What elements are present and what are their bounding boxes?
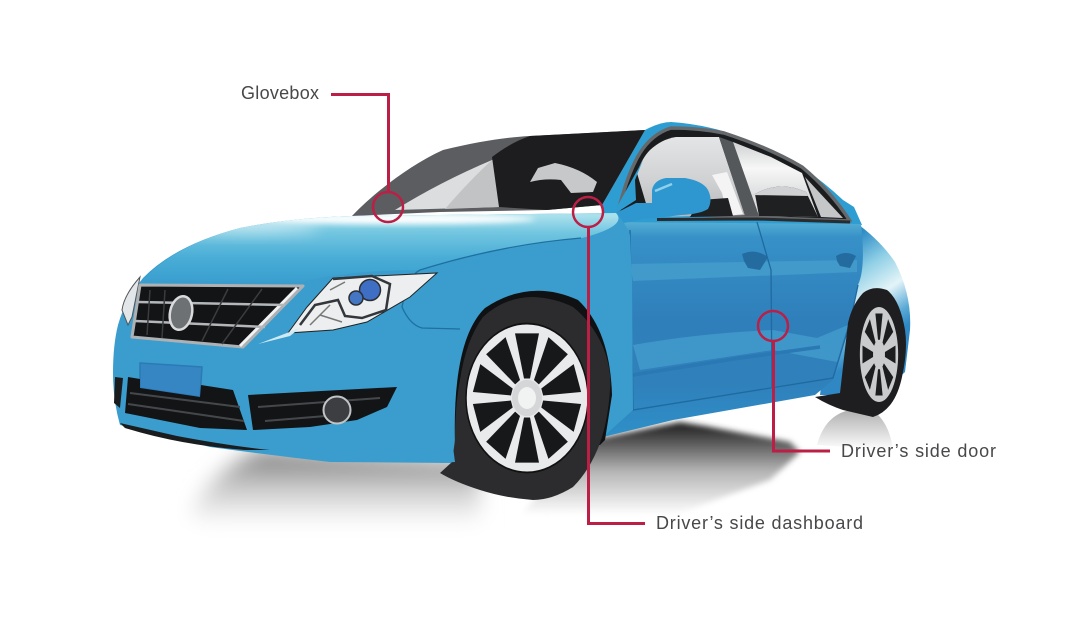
fog lamp: [324, 396, 350, 424]
quarter window: [805, 177, 843, 218]
hood highlight: [180, 214, 535, 232]
door seams: [630, 222, 858, 410]
label: glovebox: Glovebox: [241, 83, 319, 103]
front wheel arch: [455, 291, 612, 445]
marker circle: door: [758, 311, 788, 341]
bottom lip: [120, 423, 270, 450]
cabin and roof: [602, 122, 862, 228]
front body: fender and bumper: [113, 213, 633, 463]
front side window: [637, 137, 745, 217]
callout: driver's side dashboard: [573, 197, 863, 533]
rear fender: [820, 222, 910, 395]
hood: [143, 213, 618, 282]
body sliver left of front wheel: [440, 447, 455, 463]
leader line: glovebox: [331, 94, 388, 192]
door lower reflection: [633, 325, 848, 370]
door pillar: [719, 137, 759, 216]
headlight: [288, 273, 437, 333]
callout: driver's side door: [758, 311, 996, 461]
car illustration: [113, 122, 910, 500]
rear side window: [733, 142, 818, 217]
ground shadow: [190, 410, 893, 530]
callout: glovebox: [241, 83, 403, 222]
door handle: front: [742, 252, 768, 270]
marker circle: glovebox: [373, 192, 403, 222]
licence plate: [140, 363, 202, 397]
label: door: Driver’s side door: [841, 441, 996, 461]
window sill: [657, 219, 850, 222]
chrome streak below headlight: [258, 328, 300, 344]
door panels: [600, 222, 863, 437]
windshield: [352, 130, 645, 216]
hood seam: [402, 238, 581, 329]
door crease: [620, 347, 820, 377]
label: dashboard: Driver’s side dashboard: [656, 513, 863, 533]
marker circle: dashboard: [573, 197, 603, 227]
window frame and interior: [618, 128, 850, 221]
rear wheel: [815, 288, 906, 417]
door upper reflection: [630, 260, 857, 281]
infographic: car with labelled locations: [113, 86, 996, 529]
fog lamp housing: [248, 387, 397, 430]
lower grille: [114, 377, 247, 430]
side mirror: [602, 160, 710, 230]
grille badge: [167, 294, 195, 332]
left headlight sliver: [122, 277, 140, 325]
front wheel: [440, 297, 610, 500]
seat reflection: [530, 163, 597, 193]
grille: [132, 285, 303, 347]
door handle: rear: [836, 253, 856, 268]
leader line: dashboard: [588, 227, 645, 524]
leader line: door: [774, 341, 830, 451]
